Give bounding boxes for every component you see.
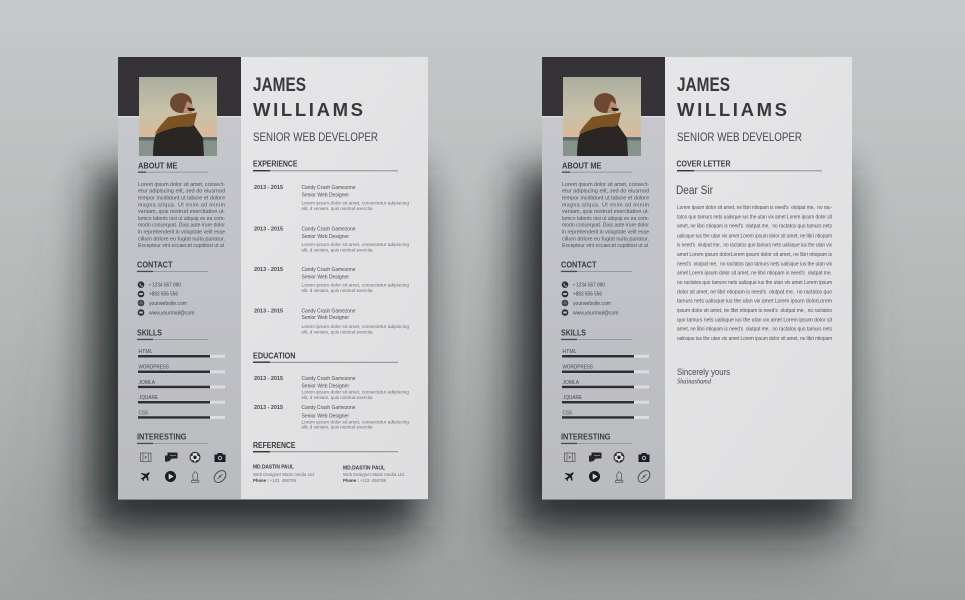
heading: cover letter: COVER LETTER xyxy=(676,158,731,168)
experience entry 2: Candy Crash Gamezone xyxy=(302,226,356,232)
heading: about me xyxy=(562,160,632,173)
heading: experience: EXPERIENCE xyxy=(253,158,298,168)
skill bars: HTML xyxy=(562,349,577,355)
experience entry 3: 2013 - 2015 xyxy=(254,267,283,273)
heading: contact xyxy=(137,260,208,272)
experience entry 3: Candy Crash Gamezone xyxy=(302,267,356,273)
reference 1 xyxy=(253,464,315,484)
contact list: www.yourmail@com xyxy=(573,310,619,316)
education entry 2: Senior Web Designer xyxy=(302,413,349,419)
name xyxy=(253,75,363,120)
signature: Shainashamd xyxy=(677,376,711,386)
skill bars: WORDPRESS xyxy=(562,364,593,370)
education entry 2: Candy Crash Gamezone xyxy=(302,405,356,411)
experience entry 1: Lorem ipsum dolor sit amet, consectetur adipiscing xyxy=(302,201,409,207)
education entry 1: elit, d veniam, quis nostrud exercita xyxy=(302,395,373,401)
heading: education: EDUCATION xyxy=(253,350,296,360)
icon: rugby ball xyxy=(636,468,652,485)
skill bars: JQUARE xyxy=(139,395,158,401)
name: JAMES xyxy=(253,75,306,96)
text block: letter body: amet, ne libri ntiopam is need's olutpat me, no ractatos quo tamurs nets xyxy=(677,327,832,333)
icon: camera xyxy=(638,453,650,462)
icon: football xyxy=(190,452,200,462)
icon: film xyxy=(564,453,575,462)
skill bars: JOMLA xyxy=(562,380,579,386)
skill bars: HTML xyxy=(138,349,153,355)
heading: skills: SKILLS xyxy=(561,328,586,338)
education entry 1: Lorem ipsum dolor sit amet, consectetur adipiscing xyxy=(302,390,409,396)
sidebar panel xyxy=(118,116,241,500)
icon: play xyxy=(589,471,600,482)
skill bars: WORDPRESS xyxy=(138,364,169,370)
text block: letter body: no ractatos quo tamurs nets ualisque ius the utan vix amet Lorem ipsum xyxy=(677,280,832,286)
skill bars xyxy=(138,349,225,419)
icon: phone xyxy=(138,281,144,288)
text block: about me: veniam, quis nostrud exercitation ul- xyxy=(138,209,225,215)
heading: interesting: INTERESTING xyxy=(561,432,611,442)
drop shadows of both sheets xyxy=(70,170,842,560)
panel: cover letter sheet xyxy=(542,57,852,500)
text block: letter body: tamurs nets ualisque ius the utan vix amet Lorem ipsum dolorLorem xyxy=(677,299,832,305)
text block: letter body: amet Lorem ipsum dolorLorem ipsum dolor sit amet, ne libri ntiopam is xyxy=(677,252,832,258)
education entry 2: Lorem ipsum dolor sit amet, consectetur adipiscing xyxy=(302,419,409,425)
heading: about me xyxy=(138,160,208,173)
heading: about me: ABOUT ME xyxy=(138,160,178,170)
dark header block xyxy=(118,57,241,116)
experience entry 2: elit, d veniam, quis nostrud exercita xyxy=(302,248,373,254)
text block: letter body: Lorem ipsum dolor sit amet, ne libri ntiopam is need's olutpat me, no rac- xyxy=(677,205,832,211)
experience entry 1: 2013 - 2015 xyxy=(254,185,283,191)
text block: about me xyxy=(138,182,225,249)
heading: interesting xyxy=(137,432,208,444)
text block: about me: cillum dolore eu fugiat nulla pariatur. xyxy=(562,236,649,242)
heading: contact: CONTACT xyxy=(561,260,597,270)
contact list: yourwebsite.com xyxy=(149,301,188,307)
text block: letter body: is need's olutpat me, no ractatos quo tamurs nets ualisque ius the utan vix xyxy=(677,242,832,248)
job title: SENIOR WEB DEVELOPER xyxy=(677,132,802,144)
experience entry 2: Senior Web Designer xyxy=(302,234,349,240)
heading: skills: SKILLS xyxy=(137,328,162,338)
icon: rugby ball xyxy=(212,468,228,485)
reference 2 xyxy=(343,465,405,484)
heading: interesting: INTERESTING xyxy=(137,432,187,442)
experience entry 3 xyxy=(254,267,409,294)
salutation: Dear Sir xyxy=(676,185,713,197)
icon: web xyxy=(562,300,568,306)
education entry 2: 2013 - 2015 xyxy=(254,405,283,411)
reference 2: Web Designer Matix media Ltd. xyxy=(343,472,405,478)
text block: letter body: quo tamurs nets ualisque ius the utan vix amet Lorem ipsum dolor sit xyxy=(677,317,833,323)
panel: resume sheet xyxy=(118,57,428,500)
icon: chat xyxy=(589,452,602,462)
sheet paper xyxy=(118,57,428,500)
text block: letter body: amet Lorem ipsum dolor sit amet, ne libri ntiopam is need's olutpat me. xyxy=(677,271,832,277)
icon: phone xyxy=(562,281,568,288)
education entry 1: Candy Crash Gamezone xyxy=(302,376,356,382)
icons: interests xyxy=(564,452,652,485)
text block: about me: etur adipiscing elit, sed do eiusmod xyxy=(562,189,649,195)
education entry 1: 2013 - 2015 xyxy=(254,376,283,382)
text block: letter body: ualisque ius the utan vix amet Lorem ipsum dolor sit amet, ne libri ntiopam xyxy=(677,233,832,239)
sidebar panel xyxy=(542,116,665,500)
reference 1: MD.DASTIN PAUL xyxy=(253,464,295,470)
text block: letter body: amet, ne libri ntiopam is need's olutpat me, no ractatos quo tamurs nets xyxy=(677,224,832,230)
education entry 2: elit, d veniam, quis nostrud exercita xyxy=(302,425,373,431)
icon: web xyxy=(138,300,144,306)
text block: about me: in reprehenderit in voluptate velit esse xyxy=(562,230,649,236)
experience entry 2 xyxy=(254,226,409,254)
text block: letter body: need's olutpat me, no ractatos quo tamurs nets ualisque ius the utan vix xyxy=(677,261,832,267)
experience entry 1 xyxy=(254,185,409,212)
experience entry 4: Candy Crash Gamezone xyxy=(302,308,356,314)
icon: mail xyxy=(562,309,568,316)
name: JAMES xyxy=(677,75,730,96)
photo: man from behind looking at the sea xyxy=(139,77,217,156)
experience entry 4: 2013 - 2015 xyxy=(254,308,283,314)
text block: letter body xyxy=(677,205,833,342)
text block: about me: Excepteur sint occaecat cupidnisi ut al xyxy=(562,243,648,249)
heading: interesting xyxy=(561,432,632,444)
contact list: yourwebsite.com xyxy=(573,301,612,307)
contact list: • 1234 567 890 xyxy=(149,282,181,288)
reference 1: Phone : +123 456789 xyxy=(253,478,296,484)
text block: about me xyxy=(562,182,649,249)
reference 2: MD.DASTIN PAUL xyxy=(343,465,386,471)
text block: letter body: ipsum dolor sit amet, ne libri ntiopam is need's olutpat me, no ractatos xyxy=(677,308,832,314)
sheet paper xyxy=(542,57,852,500)
icon: chess knight xyxy=(616,472,623,482)
icon: play xyxy=(165,471,176,482)
heading: skills xyxy=(137,328,208,340)
text block: about me: tempor incididunt ut labore et dolore xyxy=(138,196,225,202)
dark header block xyxy=(542,57,665,116)
name xyxy=(677,75,787,120)
text block: about me: magna aliqua. Ut enim ad minim xyxy=(138,202,225,208)
experience entry 1: elit, d veniam, quis nostrud exercita xyxy=(302,206,373,212)
heading: contact xyxy=(561,260,632,272)
text block: about me: cillum dolore eu fugiat nulla pariatur. xyxy=(138,236,225,242)
education entry 1 xyxy=(254,376,409,401)
text block: about me: Lorem ipsum dolor sit amet, consect- xyxy=(138,182,225,188)
experience entry 3: Lorem ipsum dolor sit amet, consectetur adipiscing xyxy=(302,283,409,289)
experience entry 3: Senior Web Designer xyxy=(302,274,349,280)
skill bars: JQUARE xyxy=(563,395,582,401)
skill bars: CSS xyxy=(562,410,572,416)
reference 1: Web Designer Matix media Ltd. xyxy=(253,472,315,478)
sidebar content xyxy=(561,160,652,485)
contact list: • 1234 567 890 xyxy=(573,282,605,288)
sign-off: Sincerely yours xyxy=(677,367,730,377)
experience entry 2: Lorem ipsum dolor sit amet, consectetur adipiscing xyxy=(302,242,409,248)
experience entry 4: elit, d veniam, quis nostrud exercita xyxy=(302,330,373,336)
education entry 1: Senior Web Designer xyxy=(302,383,349,389)
skill bars: JOMLA xyxy=(138,380,155,386)
heading: contact: CONTACT xyxy=(137,260,173,270)
job title: SENIOR WEB DEVELOPER xyxy=(253,132,378,144)
skill bars xyxy=(562,349,649,419)
icon: mail xyxy=(138,309,144,316)
text block: about me: lamco laboris nisi ut aliquip ex ea com- xyxy=(562,216,649,222)
experience entry 4: Lorem ipsum dolor sit amet, consectetur adipiscing xyxy=(302,324,409,330)
icon: plane xyxy=(140,472,150,481)
heading: reference: REFERENCE xyxy=(253,440,296,450)
name: WILLIAMS xyxy=(677,99,787,120)
icon: chess knight xyxy=(192,472,199,482)
experience entry 4: Senior Web Designer xyxy=(302,315,349,321)
contact list: +883 556 556 xyxy=(573,292,602,298)
contact list xyxy=(138,281,195,316)
contact list: +883 556 556 xyxy=(149,292,178,298)
experience entry 2: 2013 - 2015 xyxy=(254,226,283,232)
text block: about me: etur adipiscing elit, sed do eiusmod xyxy=(138,189,225,195)
experience entry 3: elit, d veniam, quis nostrud exercita xyxy=(302,288,373,294)
icon: football xyxy=(614,452,624,462)
text block: about me: tempor incididunt ut labore et dolore xyxy=(562,196,649,202)
experience entry 1: Senior Web Designer xyxy=(302,192,349,198)
text block: about me: modo consequat. Duis aute irure dolor xyxy=(562,223,649,229)
reference 2: Phone : +123 456789 xyxy=(343,478,386,484)
icon: plane xyxy=(564,472,574,481)
contact list xyxy=(562,281,619,316)
heading: about me: ABOUT ME xyxy=(562,160,602,170)
heading: skills xyxy=(561,328,632,340)
text block: letter body: dolor sit amet, ne libri ntiopam is need's olutpat me, no ractatos quo xyxy=(677,289,832,295)
text block: about me: veniam, quis nostrud exercitation ul- xyxy=(562,209,649,215)
photo: man from behind looking at the sea xyxy=(563,77,641,156)
icon: chat xyxy=(165,452,178,462)
icons: interests xyxy=(140,452,228,485)
text block: letter body: ualisque ius the utan vix amet Lorem ipsum dolor sit amet, ne libri ntiopam xyxy=(677,336,832,342)
education entry 2 xyxy=(254,405,409,431)
text block: about me: lamco laboris nisi ut aliquip ex ea com- xyxy=(138,216,225,222)
name: WILLIAMS xyxy=(253,99,363,120)
text block: about me: magna aliqua. Ut enim ad minim xyxy=(562,202,649,208)
icon: mobile xyxy=(138,291,144,297)
contact list: www.yourmail@com xyxy=(149,310,195,316)
skill bars: CSS xyxy=(138,410,148,416)
icon: film xyxy=(140,453,151,462)
text block: about me: in reprehenderit in voluptate velit esse xyxy=(138,230,225,236)
icon: mobile xyxy=(562,291,568,297)
experience entry 1: Candy Crash Gamezone xyxy=(302,185,356,191)
text block: letter body: tatos quo tamurs nets ualisque ius the utan vix amet Lorem ipsum dolor sit xyxy=(677,214,833,220)
text block: about me: modo consequat. Duis aute irure dolor xyxy=(138,223,225,229)
experience entry 4 xyxy=(254,308,409,336)
text block: about me: Excepteur sint occaecat cupidnisi ut al xyxy=(138,243,224,249)
icon: camera xyxy=(214,453,226,462)
text block: about me: Lorem ipsum dolor sit amet, consect- xyxy=(562,182,649,188)
